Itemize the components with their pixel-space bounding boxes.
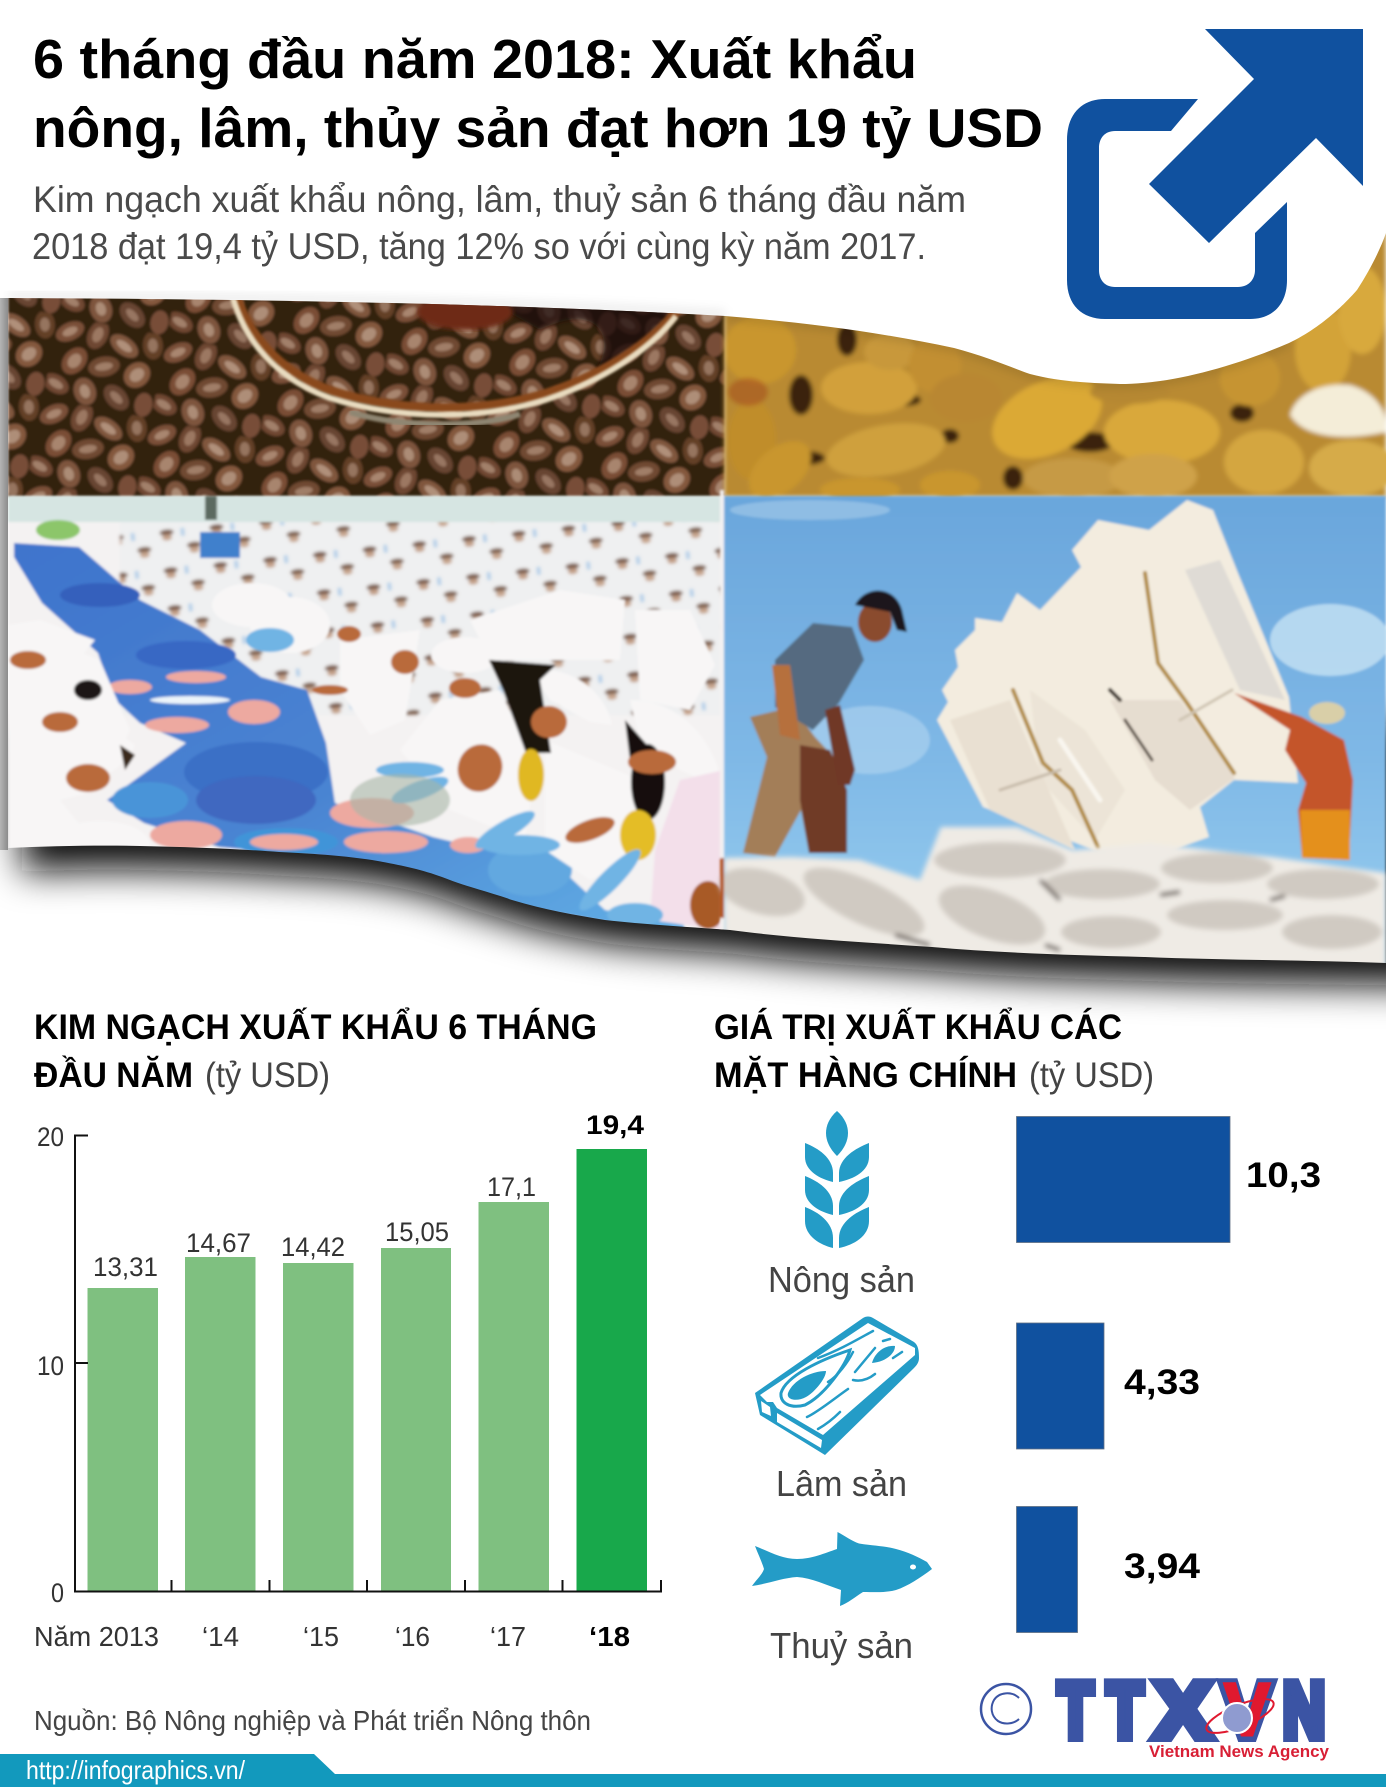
year labels: ‘15 <box>303 1621 339 1652</box>
logo: TTXVN: V <box>1224 1668 1270 1751</box>
y axis labels: 10 <box>37 1351 64 1381</box>
title: 6 tháng đầu năm 2018: Xuất khẩu <box>33 28 917 90</box>
year labels: ‘16 <box>395 1621 430 1652</box>
y axis labels: 0 <box>51 1578 64 1608</box>
year labels: ‘18 <box>589 1621 630 1652</box>
value labels: 14,42 <box>281 1232 345 1262</box>
subtitle text: Kim ngạch xuất khẩu nông, lâm, thuỷ sản 6 tháng đầu năm <box>33 179 966 220</box>
logo: TTXVN: Vietnam News Agency <box>1149 1742 1330 1761</box>
value: 4,33: 4,33 <box>1124 1363 1200 1402</box>
y axis labels: 20 <box>37 1122 64 1152</box>
title <box>33 28 1043 159</box>
logo: TTXVN: N <box>1283 1666 1325 1754</box>
inner fold shadow <box>725 316 1289 384</box>
logo: TTXVN: T <box>1107 1666 1143 1754</box>
footer band <box>0 1754 1386 1787</box>
value labels: 19,4 <box>586 1110 644 1140</box>
left chart heading: ĐẦU NĂM <box>34 1055 193 1095</box>
worker: left man <box>743 591 907 857</box>
icon: export arrow logo <box>1067 29 1363 319</box>
logo: TTXVN: T <box>1058 1666 1093 1754</box>
photo: cashew nuts <box>724 230 1386 510</box>
axes <box>75 1136 661 1592</box>
bar chart: export value by year <box>34 1110 661 1652</box>
copyright symbol <box>981 1684 1031 1734</box>
logo: TTXVN: X <box>1155 1666 1211 1754</box>
sacks: hoisted load <box>937 500 1298 857</box>
right chart heading: GIÁ TRỊ XUẤT KHẨU CÁC <box>714 1007 1122 1047</box>
right chart heading: (tỷ USD) <box>1029 1056 1154 1095</box>
bars <box>88 1149 647 1592</box>
year labels <box>34 1621 630 1652</box>
footer url: http://infographics.vn/ <box>26 1755 246 1785</box>
photo: rice sacks and workers <box>714 490 1386 976</box>
photo: coffee beans <box>8 290 725 497</box>
value labels: 14,67 <box>186 1228 251 1258</box>
title: nông, lâm, thủy sản đạt hơn 19 tỷ USD <box>33 97 1043 159</box>
year labels: ‘17 <box>490 1621 526 1652</box>
value labels: 15,05 <box>385 1217 449 1247</box>
worker: right man <box>1234 693 1353 860</box>
label: Nông sản: Nông sản <box>768 1259 915 1300</box>
icon: wheat <box>805 1111 869 1248</box>
subtitle text <box>32 179 966 267</box>
logo: TTXVN <box>1058 1666 1330 1761</box>
bar: Nông sản value <box>1016 1116 1230 1242</box>
bar: Lâm sản value <box>1016 1323 1104 1449</box>
logo: TTXVN: V <box>1222 1666 1272 1754</box>
source note: Nguồn: Bộ Nông nghiệp và Phát triển Nông thôn <box>34 1705 591 1736</box>
right chart heading <box>714 1007 1154 1095</box>
left chart heading: (tỷ USD) <box>205 1056 330 1095</box>
value labels <box>93 1110 644 1282</box>
icon: wood plank <box>755 1316 919 1455</box>
value: 3,94: 3,94 <box>1124 1547 1201 1586</box>
subtitle text: 2018 đạt 19,4 tỷ USD, tăng 12% so với cùng kỳ năm 2017. <box>32 226 926 267</box>
icon: fish <box>752 1532 932 1606</box>
y axis labels <box>37 1122 64 1608</box>
value labels: 13,31 <box>93 1252 158 1282</box>
value: 10,3: 10,3 <box>1246 1156 1321 1195</box>
photo: seafood processing workers <box>8 496 726 936</box>
label: Thuỷ sản: Thuỷ sản <box>770 1625 913 1666</box>
left chart heading <box>34 1007 597 1095</box>
value labels: 17,1 <box>487 1172 536 1202</box>
label: Lâm sản: Lâm sản <box>776 1463 907 1504</box>
right chart heading: MẶT HÀNG CHÍNH <box>714 1055 1017 1095</box>
sacks: ground pile <box>714 827 1386 976</box>
left chart heading: KIM NGẠCH XUẤT KHẨU 6 THÁNG <box>34 1007 597 1047</box>
photo collage shadow <box>0 296 1386 987</box>
bar: Thuỷ sản value <box>1016 1506 1078 1632</box>
year labels: ‘14 <box>202 1621 239 1652</box>
year labels: Năm 2013 <box>34 1621 159 1652</box>
photo collage <box>8 230 1386 976</box>
